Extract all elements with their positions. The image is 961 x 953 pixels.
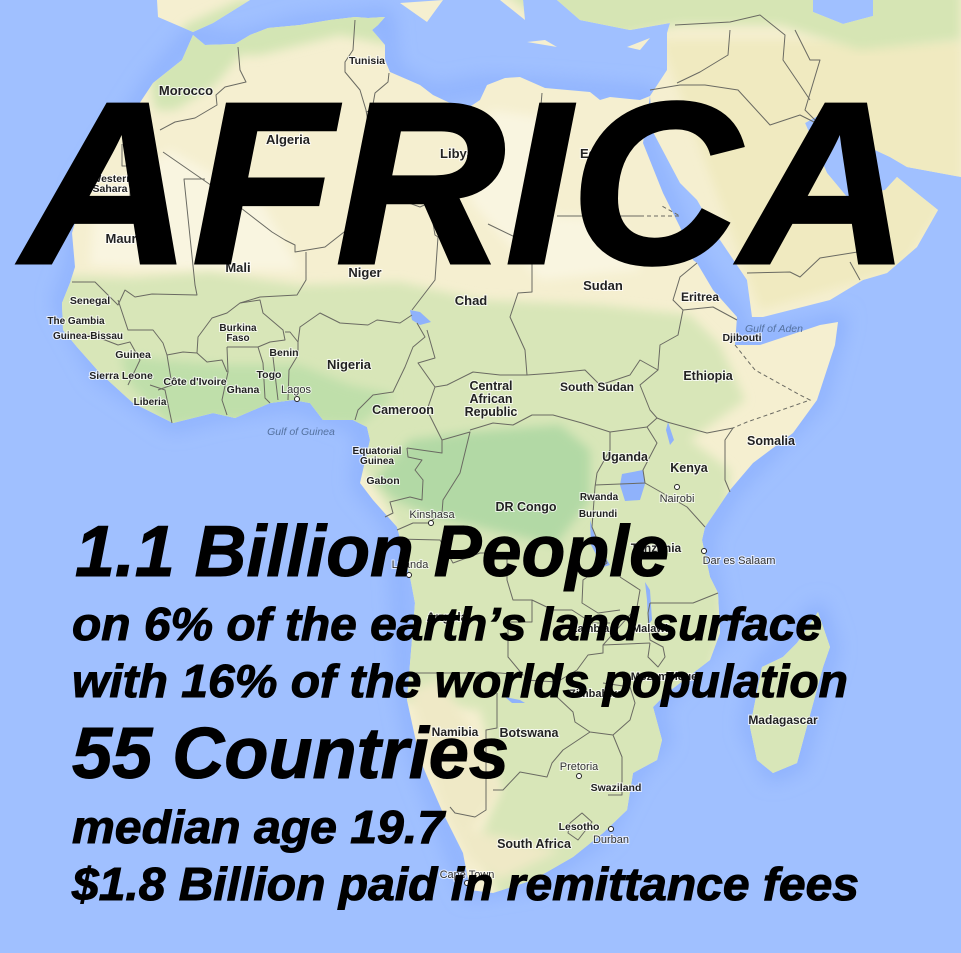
country labels: Algeria [266,132,311,147]
country labels: Equatorial [353,446,402,457]
country labels: Cameroon [372,403,434,417]
city labels and markers: Kinshasa [409,509,456,521]
Levant and Iran green [500,0,961,50]
stat: remittance fees: $1.8 Billion paid in remittance fees [71,858,859,910]
country labels: Côte d'Ivoire [163,376,227,388]
country labels: Rwanda [580,492,619,503]
country labels: Swaziland [591,782,641,794]
country labels: Namibia [432,725,479,739]
country labels: Republic [465,405,517,419]
country labels: Nigeria [327,357,372,372]
lakes [410,310,674,703]
coastal water shading [62,17,838,890]
city labels and markers: Nairobi [660,493,694,505]
country labels: Mozambique [631,671,697,683]
country labels: Gabon [366,475,400,487]
city labels and markers: Durban [593,834,629,846]
country labels: South Sudan [560,380,634,394]
country labels: Sahara [92,183,128,195]
country labels: Lesotho [559,821,599,833]
country labels: Sierra Leone [89,370,153,382]
water labels: Gulf of Aden [745,323,803,335]
city labels and markers: Luanda [392,559,429,571]
country labels: Morocco [159,83,213,98]
pale Sahara patches [90,110,640,280]
country labels: Liberia [134,397,167,408]
country labels: Togo [257,369,281,381]
country labels: Burundi [579,509,617,520]
country labels: Tunisia [349,55,385,67]
country labels: Somalia [747,434,796,448]
city labels and markers: Cape Town [440,869,494,881]
Kalahari and Namib desert tone [410,680,560,880]
country labels: Uganda [602,450,649,464]
city labels and markers: Lagos [281,384,311,396]
stat: world population share: with 16% of the worlds population [72,655,848,707]
country labels: Faso [226,333,250,344]
country labels: Ghana [227,384,259,396]
country labels: Mauritania [105,231,171,246]
country labels: Niger [348,265,382,280]
country labels: Libya [440,146,475,161]
country labels: Angola [427,610,468,624]
country labels: Sudan [583,278,623,293]
tropical Africa light green [50,272,745,900]
country labels: Guinea [115,349,151,361]
country labels: African [469,392,513,406]
country labels: Madagascar [748,713,818,727]
stat: median age: median age 19.7 [72,801,447,853]
water labels: Gulf of Guinea [267,426,335,438]
country labels: Zimbabwe [569,688,623,700]
country labels: Burkina [219,323,257,334]
country labels: Central [469,379,513,393]
country labels: Malawi [632,623,668,635]
north Africa green belt [150,0,390,110]
city labels and markers [281,384,775,886]
country labels: Zambia [571,623,610,635]
country labels: Guinea-Bissau [53,331,123,342]
water labels [267,323,803,438]
country labels: Egypt [580,146,617,161]
country labels: Senegal [70,295,110,307]
country labels: Tanzania [631,541,682,555]
city labels and markers: Pretoria [560,761,599,773]
country labels: Chad [455,293,487,308]
forest dark green [375,425,590,545]
country labels: Guinea [360,456,394,467]
country labels: South Africa [497,837,572,851]
stat: population: 1.1 Billion People [75,512,669,592]
country labels: Botswana [499,726,560,740]
country labels: Kenya [670,461,709,475]
country labels: Mali [225,260,251,275]
country labels: The Gambia [47,316,105,327]
country labels [47,55,818,851]
country labels: Benin [269,347,299,359]
stat: land surface: on 6% of the earth’s land surface [72,598,822,650]
country labels: Djibouti [722,332,762,344]
city labels and markers: Dar es Salaam [703,555,775,567]
stat: countries: 55 Countries [72,714,509,794]
title: AFRICA [17,54,910,312]
country labels: Eritrea [681,290,719,304]
country labels: Western [91,173,133,185]
statistics text block [71,512,859,910]
dashed borders: Somalia and Sudan [640,205,810,428]
country borders [72,15,870,840]
arabia desert tone [660,40,961,310]
country labels: Ethiopia [683,369,734,383]
country labels: DR Congo [495,500,557,514]
